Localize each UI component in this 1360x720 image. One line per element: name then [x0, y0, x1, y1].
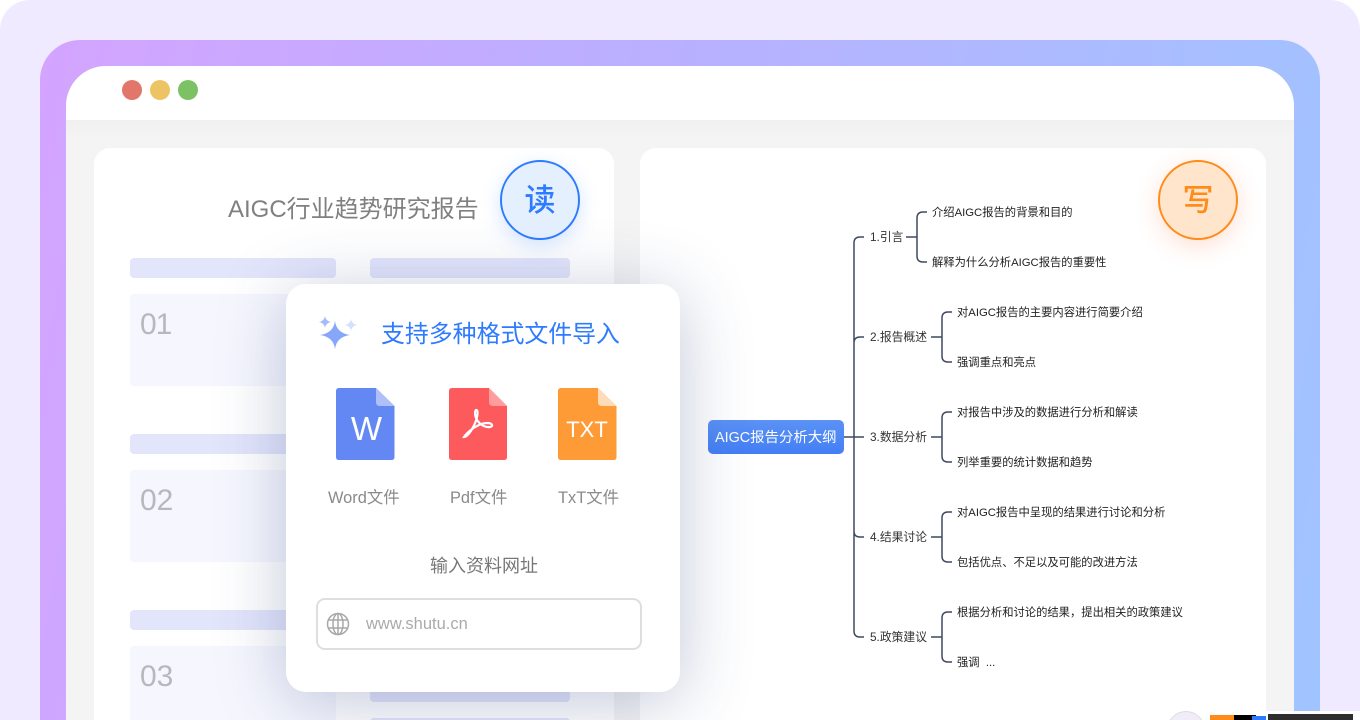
mind map root node	[708, 420, 844, 454]
branch 1 leaf b: 解释为什么分析AIGC报告的重要性	[932, 257, 1106, 269]
branch 3 leaf a: 对报告中涉及的数据进行分析和解读	[957, 407, 1138, 419]
cropped dark block	[1268, 714, 1353, 720]
icon: txt file: TXT	[566, 417, 608, 442]
write glyph: 写	[1182, 183, 1214, 218]
badge: write	[1158, 160, 1238, 240]
report section 1 heading bar	[130, 258, 336, 278]
report section 3 heading bar	[130, 610, 336, 630]
branch 2 leaf b: 强调重点和亮点	[957, 357, 1036, 369]
section number 03: 03	[140, 660, 173, 693]
report section 3 box	[130, 646, 336, 720]
section number 01: 01	[140, 308, 171, 341]
white strip	[1266, 711, 1360, 720]
icon: word file	[336, 388, 394, 460]
branch 4 leaf a: 对AIGC报告中呈现的结果进行讨论和分析	[957, 507, 1165, 519]
panel: write mind map	[640, 148, 1266, 720]
report section 2 box	[130, 470, 336, 562]
report title: AIGC行业趋势研究报告	[228, 196, 479, 223]
cropped orange block	[1210, 715, 1234, 720]
branch 3 leaf b: 列举重要的统计数据和趋势	[957, 457, 1093, 469]
panel: read document	[94, 148, 614, 720]
cropped blue block	[1252, 716, 1266, 720]
lower right bar one	[370, 682, 570, 702]
bottom right cropped footer strip	[1170, 711, 1360, 720]
icon: globe	[326, 612, 350, 636]
branch 1 label: 1.引言	[870, 230, 903, 244]
popup card: import formats	[286, 284, 680, 692]
report section 2 heading bar	[130, 434, 336, 454]
branch 4 label: 4.结果讨论	[870, 530, 927, 544]
badge: read	[500, 160, 580, 240]
icon: sparkles	[319, 316, 356, 349]
label: pdf file: Pdf文件	[450, 489, 507, 507]
window title bar	[66, 66, 1294, 120]
icon: pdf file	[449, 388, 507, 460]
section number 02: 02	[140, 484, 173, 517]
branch 5 label: 5.政策建议	[870, 630, 927, 644]
url input box	[316, 598, 642, 650]
lower right bar two	[370, 718, 570, 720]
branch 5 leaf a: 根据分析和讨论的结果，提出相关的政策建议	[957, 607, 1183, 619]
branch 4 leaf b: 包括优点、不足以及可能的改进方法	[957, 557, 1138, 569]
branch 2 leaf a: 对AIGC报告的主要内容进行简要介绍	[957, 307, 1143, 319]
branch 1 leaf a: 介绍AIGC报告的背景和目的	[932, 207, 1073, 219]
label: word file: Word文件	[328, 489, 400, 507]
popup heading: 支持多种格式文件导入	[381, 321, 620, 348]
root node label: AIGC报告分析大纲	[715, 430, 837, 446]
icon: txt file	[558, 388, 616, 460]
branch 2 label: 2.报告概述	[870, 330, 927, 344]
branch 5 leaf b: 强调 ...	[957, 657, 995, 669]
read glyph: 读	[524, 183, 556, 218]
branch 3 label: 3.数据分析	[870, 430, 927, 444]
label: txt file: TxT文件	[558, 489, 619, 507]
url prompt: 输入资料网址	[430, 556, 538, 576]
url placeholder: www.shutu.cn	[366, 615, 468, 633]
report section 1 box	[130, 294, 336, 386]
cropped avatar	[1167, 711, 1205, 720]
icon: word file: W	[351, 410, 383, 447]
report section 1 right bar	[370, 258, 570, 278]
window control dots	[122, 80, 198, 100]
cropped black block	[1234, 715, 1256, 720]
